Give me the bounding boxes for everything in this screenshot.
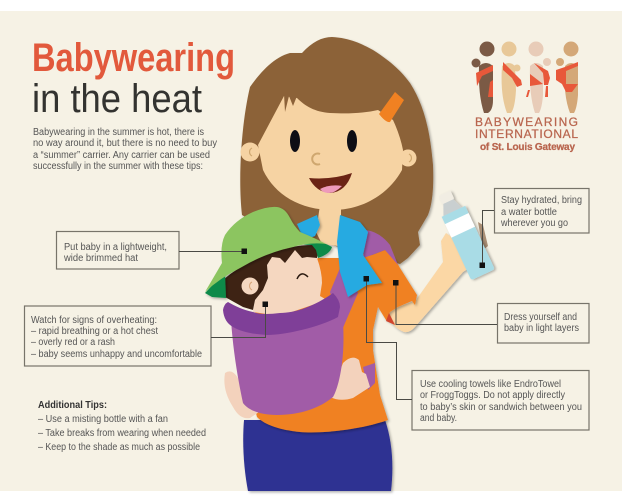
baby ear [242,278,258,294]
carrier side panel behind baby's leg [363,363,375,390]
additional tips: – Take breaks from wearing when needed [38,428,206,439]
mother's neck [316,205,341,246]
callout: hat [56,232,247,269]
hat crown [205,207,326,292]
callout: cooling towels: to baby’s skin or sandwich between you [420,402,582,413]
baby closed eye [297,274,308,279]
mother's shirt [235,250,417,432]
callout: layers: baby in light layers [504,323,579,334]
baby carrier body [231,310,344,415]
callout: layers [393,280,589,343]
intro text: a “summer” carrier. Any carrier can be used [33,150,210,161]
intro text: no way around it, but there is no need to buy [33,138,217,149]
additional tips: – Keep to the shade as much as possible [38,442,200,453]
callout: overheating: – baby seems unhappy and uncomfortable [31,349,202,360]
mother's pants [243,420,392,491]
title: Babywearing [32,36,235,80]
tongue [320,185,342,193]
logo text [475,115,578,153]
mother's hair [240,37,433,264]
callout: cooling towels: Use cooling towels like EndroTowel [420,379,561,390]
mother's forearm and hand [388,233,478,332]
callout: hydrate: wherever you go [500,218,568,229]
face [258,96,403,210]
callout: hydrate [480,188,589,268]
hair clip [379,92,404,122]
mother's head [240,92,416,210]
callout: hydrate: Stay hydrated, bring [501,195,582,206]
callout: overheating: – overly red or a rash [31,337,115,348]
fingers behind bottle [478,222,488,250]
logo: Babywearing International [472,42,578,153]
callout: hat: Put baby in a lightweight, [64,242,167,253]
elbow shadow [386,313,395,325]
logo text: of St. Louis Gateway [480,142,575,153]
mouth [309,173,352,193]
purple shoulder strap [330,230,398,330]
fringe strands [284,94,297,112]
baby's legs [224,358,370,418]
callout: hat: wide brimmed hat [63,253,138,264]
water bottle [433,188,495,280]
intro text: Babywearing in the summer is hot, there is [33,127,204,138]
title [32,36,235,121]
callout: overheating: – rapid breathing or a hot chest [31,326,158,337]
callout: overheating: Watch for signs of overheating: [31,315,157,326]
callout: overheating [24,302,268,366]
callout: layers: Dress yourself and [504,312,577,323]
intro text: successfully in the summer with these tips: [33,161,203,172]
baby's hat [205,207,332,298]
title: in the heat [32,77,202,121]
baby face [253,250,327,316]
hat brim underside [205,272,226,298]
baby's head [223,245,327,316]
logo text: INTERNATIONAL [475,127,578,141]
intro text [33,127,217,172]
callout: cooling towels: and baby. [420,413,457,424]
illustration: mother and baby [205,37,495,491]
logo figures [472,42,578,113]
nose [312,154,320,164]
baby hair [223,245,318,310]
callout: cooling towels [364,276,589,430]
cooling towel [297,215,382,297]
callout: cooling towels: or FroggToggs. Do not apply directly [420,390,565,401]
additional tips: Additional Tips: [38,400,107,411]
callout: hydrate: a water bottle [501,207,557,218]
carrier hood band [223,293,340,335]
logo text: BABYWEARING [475,115,578,129]
ears [240,142,260,162]
additional tips [38,400,206,453]
additional tips: – Use a misting bottle with a fan [38,414,168,425]
eyes [290,130,300,152]
